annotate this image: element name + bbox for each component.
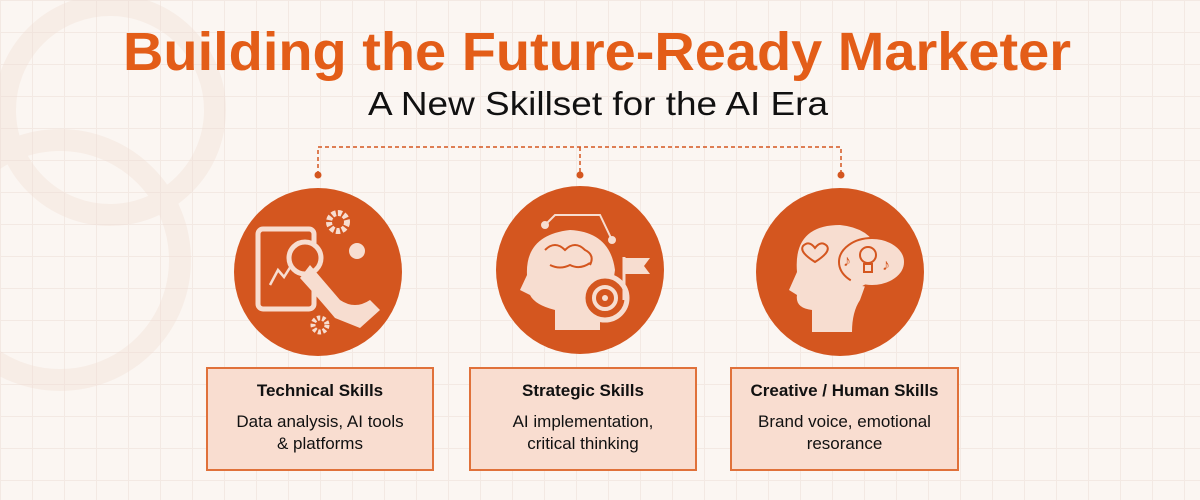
- box: creative skills: resorance: [807, 434, 882, 453]
- box: creative skills: Creative / Human Skills: [750, 381, 939, 400]
- subtitle: A New Skillset for the AI Era: [368, 85, 829, 122]
- box: technical skills: Technical Skills: [257, 381, 383, 400]
- box: strategic skills: AI implementation,: [513, 412, 653, 431]
- box: strategic skills: Strategic Skills: [522, 381, 644, 400]
- icon: strategic skills circle: [496, 186, 664, 354]
- decorative background swirl: [0, 5, 215, 380]
- connector lines: [318, 147, 841, 175]
- box: creative skills: Brand voice, emotional: [758, 412, 931, 431]
- title: Building the Future-Ready Marketer: [123, 22, 1071, 82]
- box: strategic skills: critical thinking: [527, 434, 639, 453]
- box: technical skills: & platforms: [277, 434, 363, 453]
- box: technical skills: [206, 367, 434, 471]
- icon: technical skills circle: [234, 188, 402, 356]
- icon: creative skills circle: ♪: [882, 257, 890, 274]
- icon: creative skills circle: ♪: [843, 253, 851, 270]
- icon: creative skills circle: [756, 188, 924, 356]
- box: strategic skills: [469, 367, 697, 471]
- box: creative skills: [730, 367, 959, 471]
- box: technical skills: Data analysis, AI tools: [236, 412, 404, 431]
